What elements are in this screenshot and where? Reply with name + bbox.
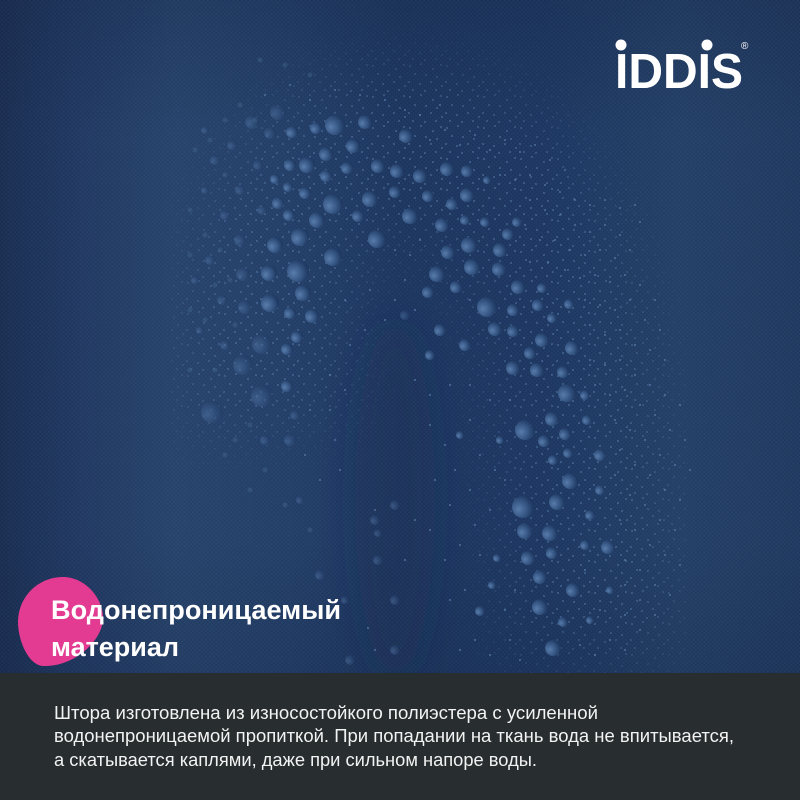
heading accent: pink blob xyxy=(18,577,103,666)
logo: IDDIS: IDDIS xyxy=(615,45,743,99)
description text xyxy=(54,702,734,770)
heading: материал xyxy=(51,632,179,662)
soft droplets on the left xyxy=(190,60,310,530)
description panel xyxy=(0,673,800,800)
dark fold in the fabric xyxy=(355,320,435,680)
large droplets xyxy=(261,115,615,656)
description text: водонепроницаемой пропиткой. При попадании на ткань вода не впитывается, xyxy=(54,725,734,746)
heading: Водонепроницаемый xyxy=(51,595,341,625)
small droplets xyxy=(265,85,690,660)
description text: а скатывается каплями, даже при сильном напоре воды. xyxy=(54,749,537,770)
description text: Штора изготовлена из износостойкого полиэстера с усиленной xyxy=(54,702,598,723)
faint droplets on the left xyxy=(191,104,410,665)
logo: IDDIS: ® xyxy=(741,41,749,52)
heading xyxy=(51,595,341,662)
